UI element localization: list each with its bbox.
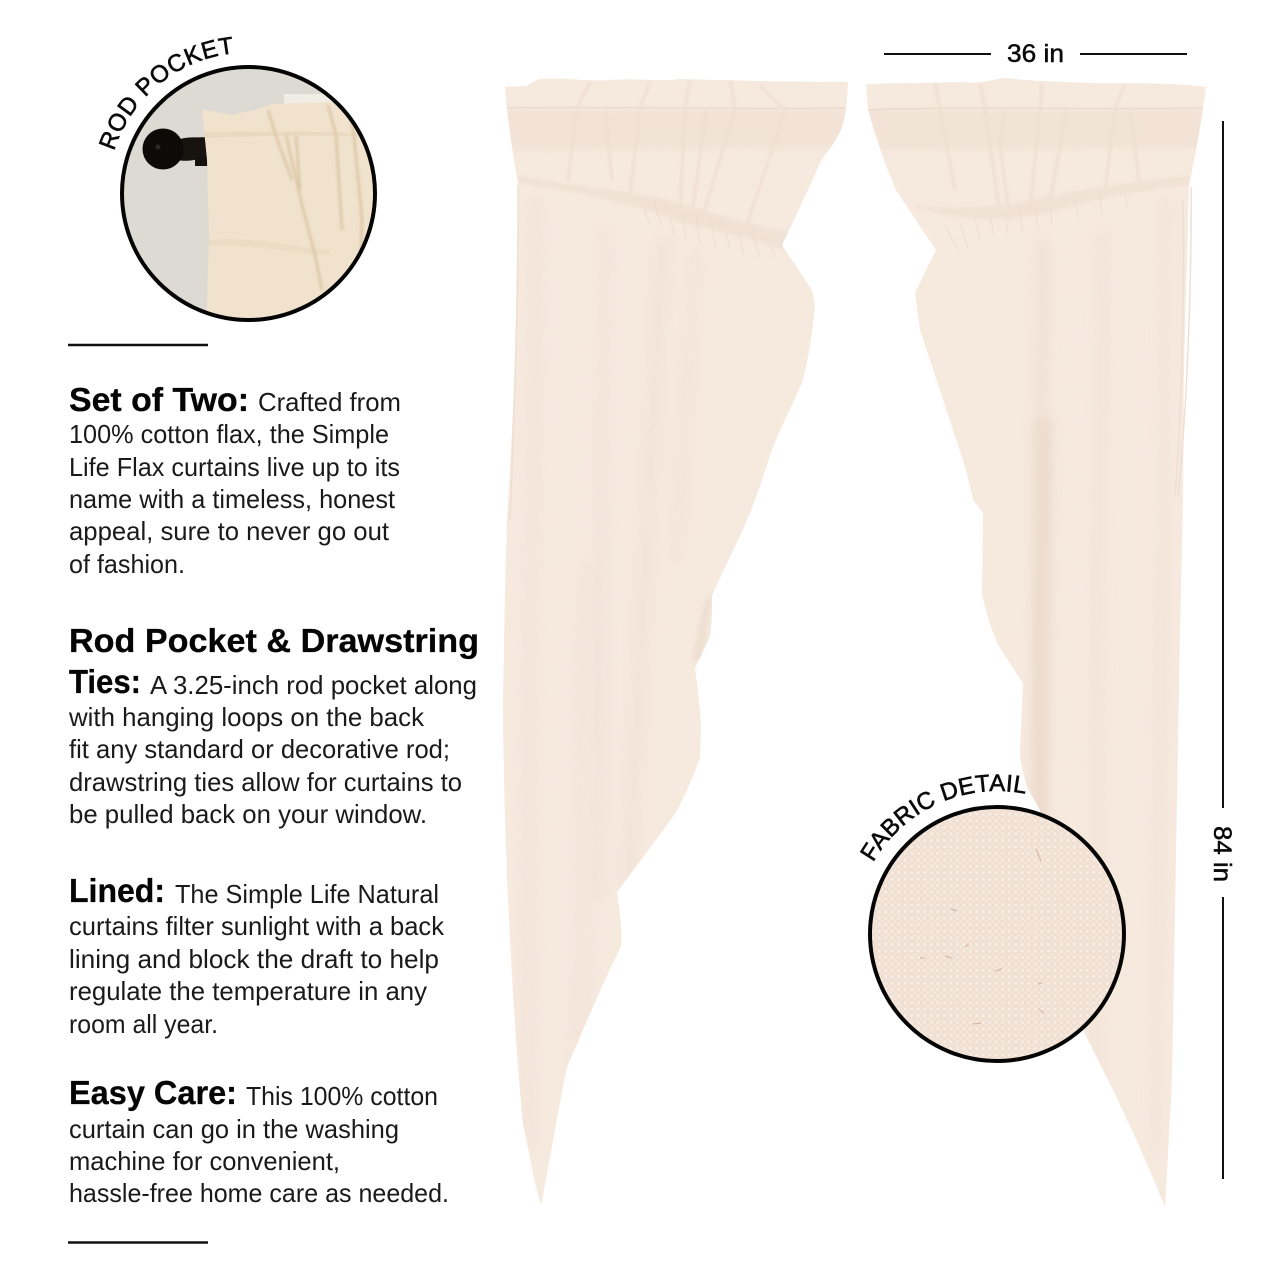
body: easy care xyxy=(69,1081,449,1208)
body: lined: regulate the temperature in any xyxy=(69,976,427,1006)
drawstring tie: left xyxy=(510,185,518,520)
body: lined: curtains filter sunlight with a back xyxy=(69,911,445,941)
text block: set of two xyxy=(69,381,401,579)
body: easy care: machine for convenient, xyxy=(69,1146,340,1176)
body: set of two: 100% cotton flax, the Simple xyxy=(69,419,389,449)
curtain photo: left panel xyxy=(503,79,848,1205)
text block: lined xyxy=(69,872,445,1039)
label: rod pocket: ROD POCKET xyxy=(98,36,232,150)
body: easy care: hassle-free home care as needed. xyxy=(69,1178,449,1208)
body: rod pocket and drawstring ties: with hanging loops on the back xyxy=(68,702,425,732)
inset photo: rod and curtain xyxy=(124,69,373,318)
body: set of two xyxy=(69,387,401,579)
text block: easy care xyxy=(69,1074,449,1208)
body: lined xyxy=(69,879,445,1039)
heading: set of two: Set of Two: xyxy=(69,381,249,418)
heading: easy care: Easy Care: xyxy=(69,1074,237,1111)
heading: lined: Lined: xyxy=(69,872,165,909)
heading: rod pocket and drawstring ties: Rod Pocket & Drawstring xyxy=(69,622,479,659)
body: lined: room all year. xyxy=(69,1009,218,1039)
body: rod pocket and drawstring ties: drawstring ties allow for curtains to xyxy=(69,767,462,797)
body: rod pocket and drawstring ties: fit any standard or decorative rod; xyxy=(69,734,450,764)
body: rod pocket and drawstring ties xyxy=(68,670,477,829)
ring: fabric detail xyxy=(870,807,1124,1061)
ring: rod pocket xyxy=(122,67,375,320)
body: lined: lining and block the draft to help xyxy=(69,944,439,974)
body: easy care: This 100% cotton xyxy=(246,1081,438,1111)
body: set of two: Crafted from xyxy=(258,387,401,417)
dimension: width 36 in: 36 in xyxy=(1007,40,1064,68)
label: fabric detail: FABRIC DETAIL xyxy=(860,774,1026,862)
body: set of two: of fashion. xyxy=(69,549,185,579)
dimension: height 84 in: 84 in xyxy=(1208,826,1236,882)
callout: rod pocket xyxy=(98,36,377,322)
body: set of two: Life Flax curtains live up to its xyxy=(69,452,400,482)
body: set of two: appeal, sure to never go out xyxy=(69,516,390,546)
heading: rod pocket and drawstring ties: Ties: xyxy=(69,663,141,700)
callout: fabric detail xyxy=(860,774,1126,1063)
body: set of two: name with a timeless, honest xyxy=(69,484,396,514)
body: lined: The Simple Life Natural xyxy=(175,879,439,909)
heading: rod pocket and drawstring ties xyxy=(69,622,479,700)
inset photo: woven fabric xyxy=(868,805,1126,1063)
curtain photo: right panel xyxy=(866,78,1206,1207)
body: rod pocket and drawstring ties: A 3.25-inch rod pocket along xyxy=(150,670,477,700)
body: easy care: curtain can go in the washing xyxy=(69,1114,399,1144)
drawstring tie: right xyxy=(1175,187,1191,497)
text block: rod pocket and drawstring ties xyxy=(68,622,479,829)
body: rod pocket and drawstring ties: be pulled back on your window. xyxy=(69,799,427,829)
